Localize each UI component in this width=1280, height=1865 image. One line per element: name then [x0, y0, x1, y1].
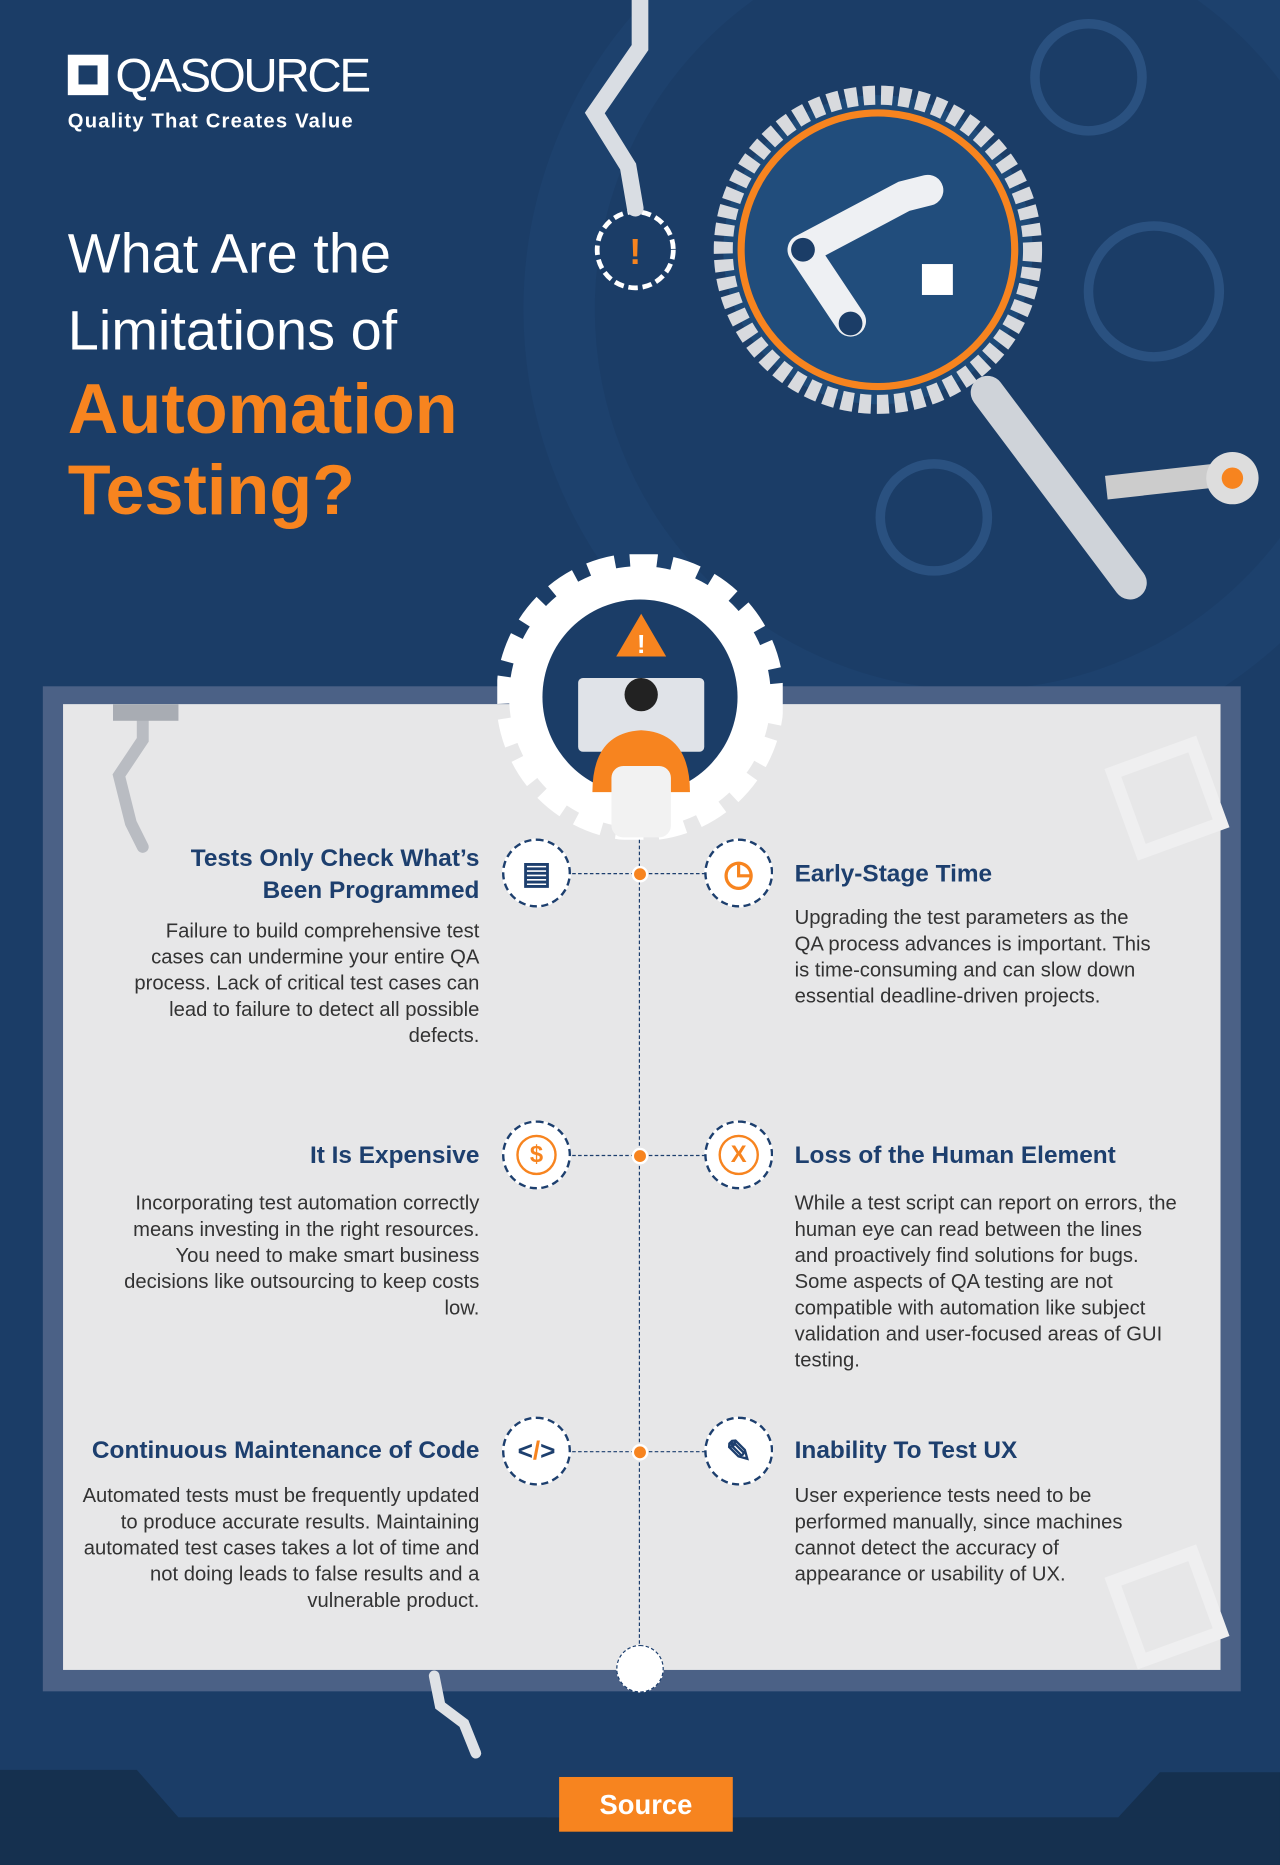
icon: X: X: [731, 1141, 747, 1167]
icon: robot arm left: [112, 704, 178, 853]
gear with worker: !: [637, 629, 646, 659]
icon: dollar: [502, 1120, 571, 1189]
item: tests only check: Tests Only Check What’s: [191, 844, 479, 872]
item: inability to test UX: User experience tests need to be performed manually, since machines cannot detect the accuracy of appearance or usability of UX.: [795, 1484, 1122, 1585]
item: inability to test UX: [795, 1437, 1122, 1585]
background decorative arc: [523, 0, 1280, 761]
item: loss of human element: Loss of the Human Element: [795, 1142, 1116, 1169]
icon: dollar: $: [530, 1141, 543, 1167]
item: early-stage time: Early-Stage Time: [795, 860, 992, 887]
logo: [68, 50, 370, 132]
icon: pencil ruler: [704, 1417, 773, 1486]
title: What Are the: [68, 221, 391, 284]
item: tests only check: Failure to build comprehensive test cases can undermine your entire QA process. Lack of critical test cases can lead to failure to detect all possible defects.: [134, 919, 479, 1047]
item: inability to test UX: Inability To Test UX: [795, 1437, 1017, 1464]
item: loss of human element: While a test script can report on errors, the human eye can read between the lines and proactively find solutions for bugs. Some aspects of QA testing are not compatible with automation like subject validation and user-focused areas of GUI testing.: [795, 1192, 1177, 1371]
source button: [559, 1777, 733, 1832]
illustration: robotic arm with magnifier: [584, 0, 1259, 600]
item: continuous maintenance: Continuous Maintenance of Code: [92, 1437, 479, 1464]
icon: code: /: [533, 1436, 540, 1465]
item: continuous maintenance: Automated tests must be frequently updated to produce accurate results. Maintaining automated test cases takes a lot of time and not doing leads to false results and a vulnerable product.: [83, 1484, 479, 1612]
panel frame: [43, 686, 1241, 1691]
title: Limitations of: [68, 299, 397, 362]
logo: Quality That Creates Value: [68, 109, 354, 132]
item: expensive: It Is Expensive: [310, 1142, 479, 1169]
item: early-stage time: [795, 860, 1151, 1007]
bottom band: [0, 1770, 1280, 1865]
icon: X: [704, 1120, 773, 1189]
icon: document: ▤: [522, 855, 551, 890]
gear with worker: [497, 554, 783, 840]
icon: clock: ◷: [723, 853, 754, 893]
illustration: robotic arm with magnifier: !: [629, 232, 641, 272]
icon: document: [502, 839, 571, 908]
title: [68, 221, 458, 529]
decorative watermark logos: [1104, 736, 1230, 861]
panel inner: [63, 704, 1221, 1670]
item: tests only check: [134, 844, 480, 1047]
item: expensive: Incorporating test automation correctly means investing in the right resources. You need to make smart business decisions like outsourcing to keep costs low.: [124, 1192, 479, 1319]
icon: pencil ruler: ✎: [726, 1433, 752, 1468]
icon: robot arm bottom: [428, 1670, 482, 1758]
title: Testing?: [68, 451, 355, 529]
logo: QASOURCE: [115, 50, 369, 102]
center timeline: [639, 840, 640, 1656]
source button: Source: [600, 1788, 692, 1819]
icon: clock: [704, 839, 773, 908]
title: Automation: [68, 370, 458, 448]
item: early-stage time: Upgrading the test parameters as the QA process advances is important. This is time-consuming and can slow down essential deadline-driven projects.: [795, 906, 1151, 1007]
icon: code: [502, 1417, 571, 1486]
icon: code: < >: [518, 1436, 555, 1465]
item: tests only check: Been Programmed: [263, 877, 479, 904]
